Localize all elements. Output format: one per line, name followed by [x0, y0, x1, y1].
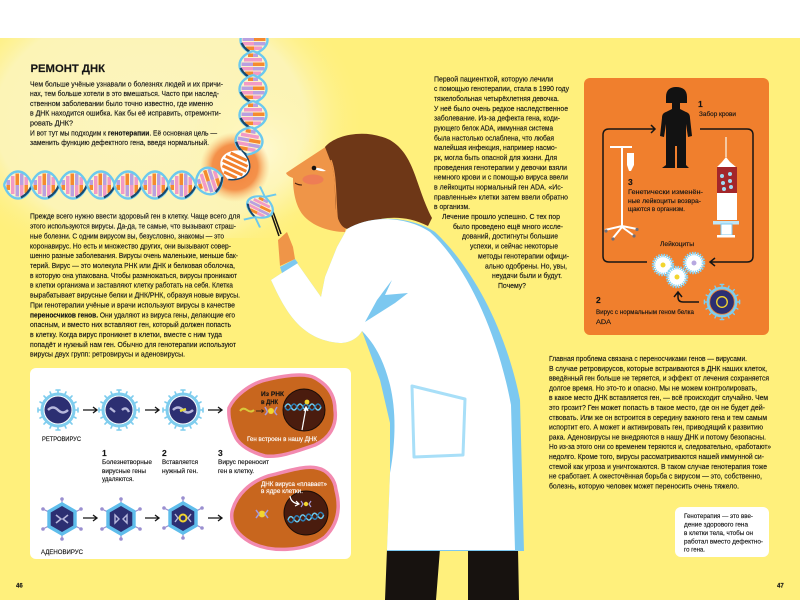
text block: viruses as carriers: шенно разные заболевания. Вирусы очень маленькие, меньше бак-: [30, 252, 238, 260]
steps: нужный ген.: [162, 468, 198, 475]
text block: first patient: успехи, и сейчас некоторые: [470, 243, 558, 251]
text block: main problem: ствовать. Или же он встроится в середину важного гена и тем самым: [549, 415, 767, 422]
text block: first patient: была настолько ослаблена, что любая: [434, 134, 554, 142]
cell label: from rna to dna: в ДНК: [261, 399, 278, 406]
text block: first patient: [434, 75, 570, 290]
callout: gene therapy definition: Генотерапия — это вве-: [684, 513, 753, 520]
cheek: [302, 174, 324, 184]
hair: [325, 134, 432, 229]
label: adenovirus: АДЕНОВИРУС: [41, 549, 84, 556]
steps: 1: [102, 448, 107, 458]
step 3 text: Генетически изменён-: [628, 189, 703, 196]
text block: main problem: не сработает. А ожесточённая борьба с вирусом — это, собственно,: [549, 473, 762, 481]
text block: intro: ровать ДНК?: [30, 120, 73, 128]
step 2 text: [596, 295, 695, 326]
text block: viruses as carriers: [30, 213, 240, 359]
cell label: virus dna floats: в ядре клетки.: [261, 488, 303, 495]
steps: Вирус переносит: [218, 459, 269, 466]
text block: main problem: стемой как угроза и уничтожаются. В таком случае генотерапия тоже: [549, 463, 767, 471]
text block: viruses as carriers: попадёт и нужный нам ген. Обычно для генотерапии используют: [30, 341, 237, 349]
text block: main problem: долгое время. Но это-то и опасно. Мы не можем контролировать,: [549, 385, 757, 392]
step 2 text: 2: [596, 295, 601, 305]
text block: intro: заменить функцию дефектного гена, введя нормальный.: [30, 139, 209, 147]
icon: iv stand: [604, 146, 639, 241]
text block: first patient: У неё было очень редкое наследственное: [434, 105, 568, 113]
text block: main problem: [549, 355, 771, 490]
illustration: scientist: [240, 134, 524, 600]
hand with tweezers: [270, 209, 295, 266]
coat pocket: [412, 386, 465, 457]
text block: first patient: дований, достигнуты большие: [462, 233, 558, 241]
text block: viruses as carriers: вирусы двух групп: ретровирусы и аденовирусы.: [30, 352, 185, 359]
text block: main problem: это грозит? Ген может попасть в такое место, где он не будет дей-: [549, 404, 765, 412]
text block: viruses as carriers: вырабатывает вирусные белки и ДНК/РНК, образуя новые вирусы.: [30, 292, 240, 300]
text block: first patient: рк, могла быть опасной для жизни. Для: [434, 154, 557, 162]
text block: viruses as carriers: в клетку. Когда вирус проникнет в клетки, вместе с ним туда: [30, 332, 222, 339]
cell label: from rna to dna: [261, 391, 284, 406]
step 3 text: 3: [628, 177, 633, 187]
panel: treatment cycle: [584, 78, 769, 335]
text block: main problem: болезнь, которую человек может переносить очень тяжело.: [549, 482, 739, 490]
text block: first patient: Первой пациенткой, которую лечили: [434, 75, 553, 83]
text block: intro: Чем больше учёные узнавали о болезнях людей и их причи-: [30, 80, 223, 88]
text block: first patient: в организм.: [434, 204, 470, 211]
text block: first patient: методы генотерапии офици-: [478, 253, 569, 260]
repaired dna segment: [215, 144, 255, 186]
cell with retrovirus gene: [229, 375, 335, 456]
icon: virus with normal gene: [704, 284, 740, 320]
text block: first patient: тяжелобольная четырёхлетняя девочка.: [434, 95, 559, 103]
cell label: gene built in: Ген встроен в нашу ДНК: [247, 436, 317, 443]
callout: gene therapy definition: работал вместо дефектно-: [684, 538, 763, 545]
steps: Болезнетворные: [102, 459, 153, 466]
text block: viruses as carriers: опасным, и вместо них вставляют ген, который должен попасть: [30, 321, 231, 329]
text block: first patient: Лечение прошло успешно. С тех пор: [442, 214, 560, 221]
face: [286, 146, 352, 232]
text block: main problem: в какое место ДНК вставляется ген, — всё происходит случайно. Чем: [549, 394, 768, 402]
adenovirus row: [41, 496, 222, 541]
white top band: [0, 0, 800, 38]
callout: gene therapy definition: го гена.: [684, 546, 705, 553]
page number left: 46: [16, 582, 23, 590]
text block: first patient: Почему?: [498, 283, 526, 290]
text block: main problem: Но из-за этого они со временем теряются и, следовательно, «работают»: [549, 443, 771, 451]
step 3 text: ные лейкоциты возвра-: [628, 198, 701, 205]
callout: gene therapy definition: [675, 507, 769, 557]
cell label: virus dna floats: ДНК вируса «плавает»: [261, 481, 328, 488]
dna helix: [4, 26, 268, 198]
cycle arrows: [603, 125, 753, 302]
held dna fragment: [240, 185, 280, 229]
callout: gene therapy definition: дение здорового гена: [684, 521, 749, 528]
text block: first patient: правленные» клетки затем ввели обратно: [434, 193, 568, 201]
cuff: [280, 259, 298, 273]
text block: main problem: недолго. Кроме того, вирусы рассматриваются нашей иммунной си-: [549, 453, 764, 461]
text block: viruses as carriers: в клетки организма и заставляют клетку работать на себя. Клетка: [30, 282, 233, 290]
cell label: from rna to dna: Из РНК: [261, 391, 284, 398]
step 3 text: [628, 177, 703, 213]
text block: viruses as carriers: При генотерапии учёные и врачи используют вирусы в качестве: [30, 302, 235, 309]
text block: viruses as carriers: коронавирус. Но есть и множество других, они вызывают совер-: [30, 243, 231, 250]
step 3 text: щаются в организм.: [628, 206, 685, 213]
text block: main problem: рака. Аденовирусы не внедряются в нашу ДНК и потому безопасны.: [549, 433, 766, 441]
text block: main problem: Главная проблема связана с переносчиками генов — вирусами.: [549, 355, 747, 363]
steps: [102, 448, 269, 483]
steps: 3: [218, 448, 223, 458]
text block: first patient: рующего белок ADA, иммунная система: [434, 124, 553, 132]
text block: first patient: ально одобрены. Но, увы,: [485, 262, 567, 270]
text block: viruses as carriers: переносчиков генов. Они удаляют из вируса гены, делающие его: [30, 312, 235, 319]
steps: 2: [162, 448, 167, 458]
retrovirus row: [38, 390, 222, 430]
text block: viruses as carriers: ные болезни. С одним вирусом вы, безусловно, знакомы — это: [30, 232, 224, 240]
text block: first patient: было проведено ещё много иссле-: [453, 223, 563, 231]
text block: intro: в ДНК находится ошибка. Как бы её исправить, отремонти-: [30, 110, 221, 118]
text block: main problem: В случае ретровирусов, которые встраиваются в ДНК наших клеток,: [549, 366, 767, 373]
step 1 text: 1: [698, 99, 703, 109]
text block: first patient: неудачи были и будут.: [492, 272, 562, 280]
steps: удаляются.: [102, 476, 134, 483]
step 1 text: [698, 99, 736, 118]
text block: first patient: в лейкоциты нормальный ген ADA. «Ис-: [434, 184, 563, 192]
eye: [312, 166, 326, 171]
text block: intro: И вот тут мы подходим к генотерапии. Её основная цель —: [30, 130, 217, 137]
text block: viruses as carriers: Прежде всего нужно ввести здоровый ген в клетку. Чаще всего для: [30, 213, 240, 221]
text block: main problem: испортит его. А может и активировать ген, приводящий к развитию: [549, 424, 763, 432]
text block: intro: ственном заболевании было точно известно, где именно: [30, 100, 213, 108]
text block: first patient: малейшая инфекция, например насмо-: [434, 144, 557, 152]
cell with adenovirus gene: [232, 467, 338, 549]
steps: Вставляется: [162, 459, 198, 466]
text block: viruses as carriers: в которую она упакована. Чтобы размножаться, вирусы проникают: [30, 272, 238, 280]
lab coat: [271, 219, 524, 551]
callout: gene therapy definition: в клетки тела, чтобы он: [684, 530, 753, 537]
text block: intro: [30, 80, 223, 147]
icon: child silhouette: [660, 87, 692, 168]
label: retrovirus: РЕТРОВИРУС: [42, 436, 82, 443]
title: РЕМОНТ ДНК: [30, 63, 105, 75]
text block: first patient: проведения генотерапии у девочки взяли: [434, 165, 567, 172]
text block: main problem: введённый ген больше не теряется, и эффект от лечения сохраняется: [549, 375, 769, 383]
text block: first patient: с помощью генотерапии, стала в 1990 году: [434, 86, 570, 93]
orange glow around repaired gene: [200, 132, 270, 202]
legs: [385, 549, 519, 600]
icon: leucocytes: [654, 254, 704, 286]
icon: syringe: [713, 137, 739, 238]
steps: вирусные гены: [102, 468, 146, 475]
text block: first patient: немного крови и с помощью вируса ввели: [434, 175, 568, 182]
mouth: [295, 183, 302, 185]
panel: virus diagram: [30, 368, 351, 559]
sleeve crease: [365, 280, 408, 322]
text block: intro: нах, тем больше хотели в это вмешаться. Часто при наслед-: [30, 90, 219, 98]
steps: ген в клетку.: [218, 468, 254, 475]
cell label: virus dna floats: [261, 481, 328, 495]
text block: first patient: заболевание. Из-за дефекта гена, коди-: [434, 115, 560, 123]
step 1 text: Забор крови: [699, 111, 736, 118]
page number right: 47: [777, 582, 784, 590]
text block: viruses as carriers: терий. Вирус — это молекула РНК или ДНК и белковая оболочка,: [30, 262, 235, 270]
text block: viruses as carriers: этого используются вирусы. Да-да, те самые, что вызывают страш-: [30, 224, 236, 231]
step 2 text: Вирус с нормальным геном белка: [596, 309, 695, 316]
label: leucocytes: Лейкоциты: [660, 241, 694, 248]
step 2 text: ADA: [596, 319, 612, 326]
